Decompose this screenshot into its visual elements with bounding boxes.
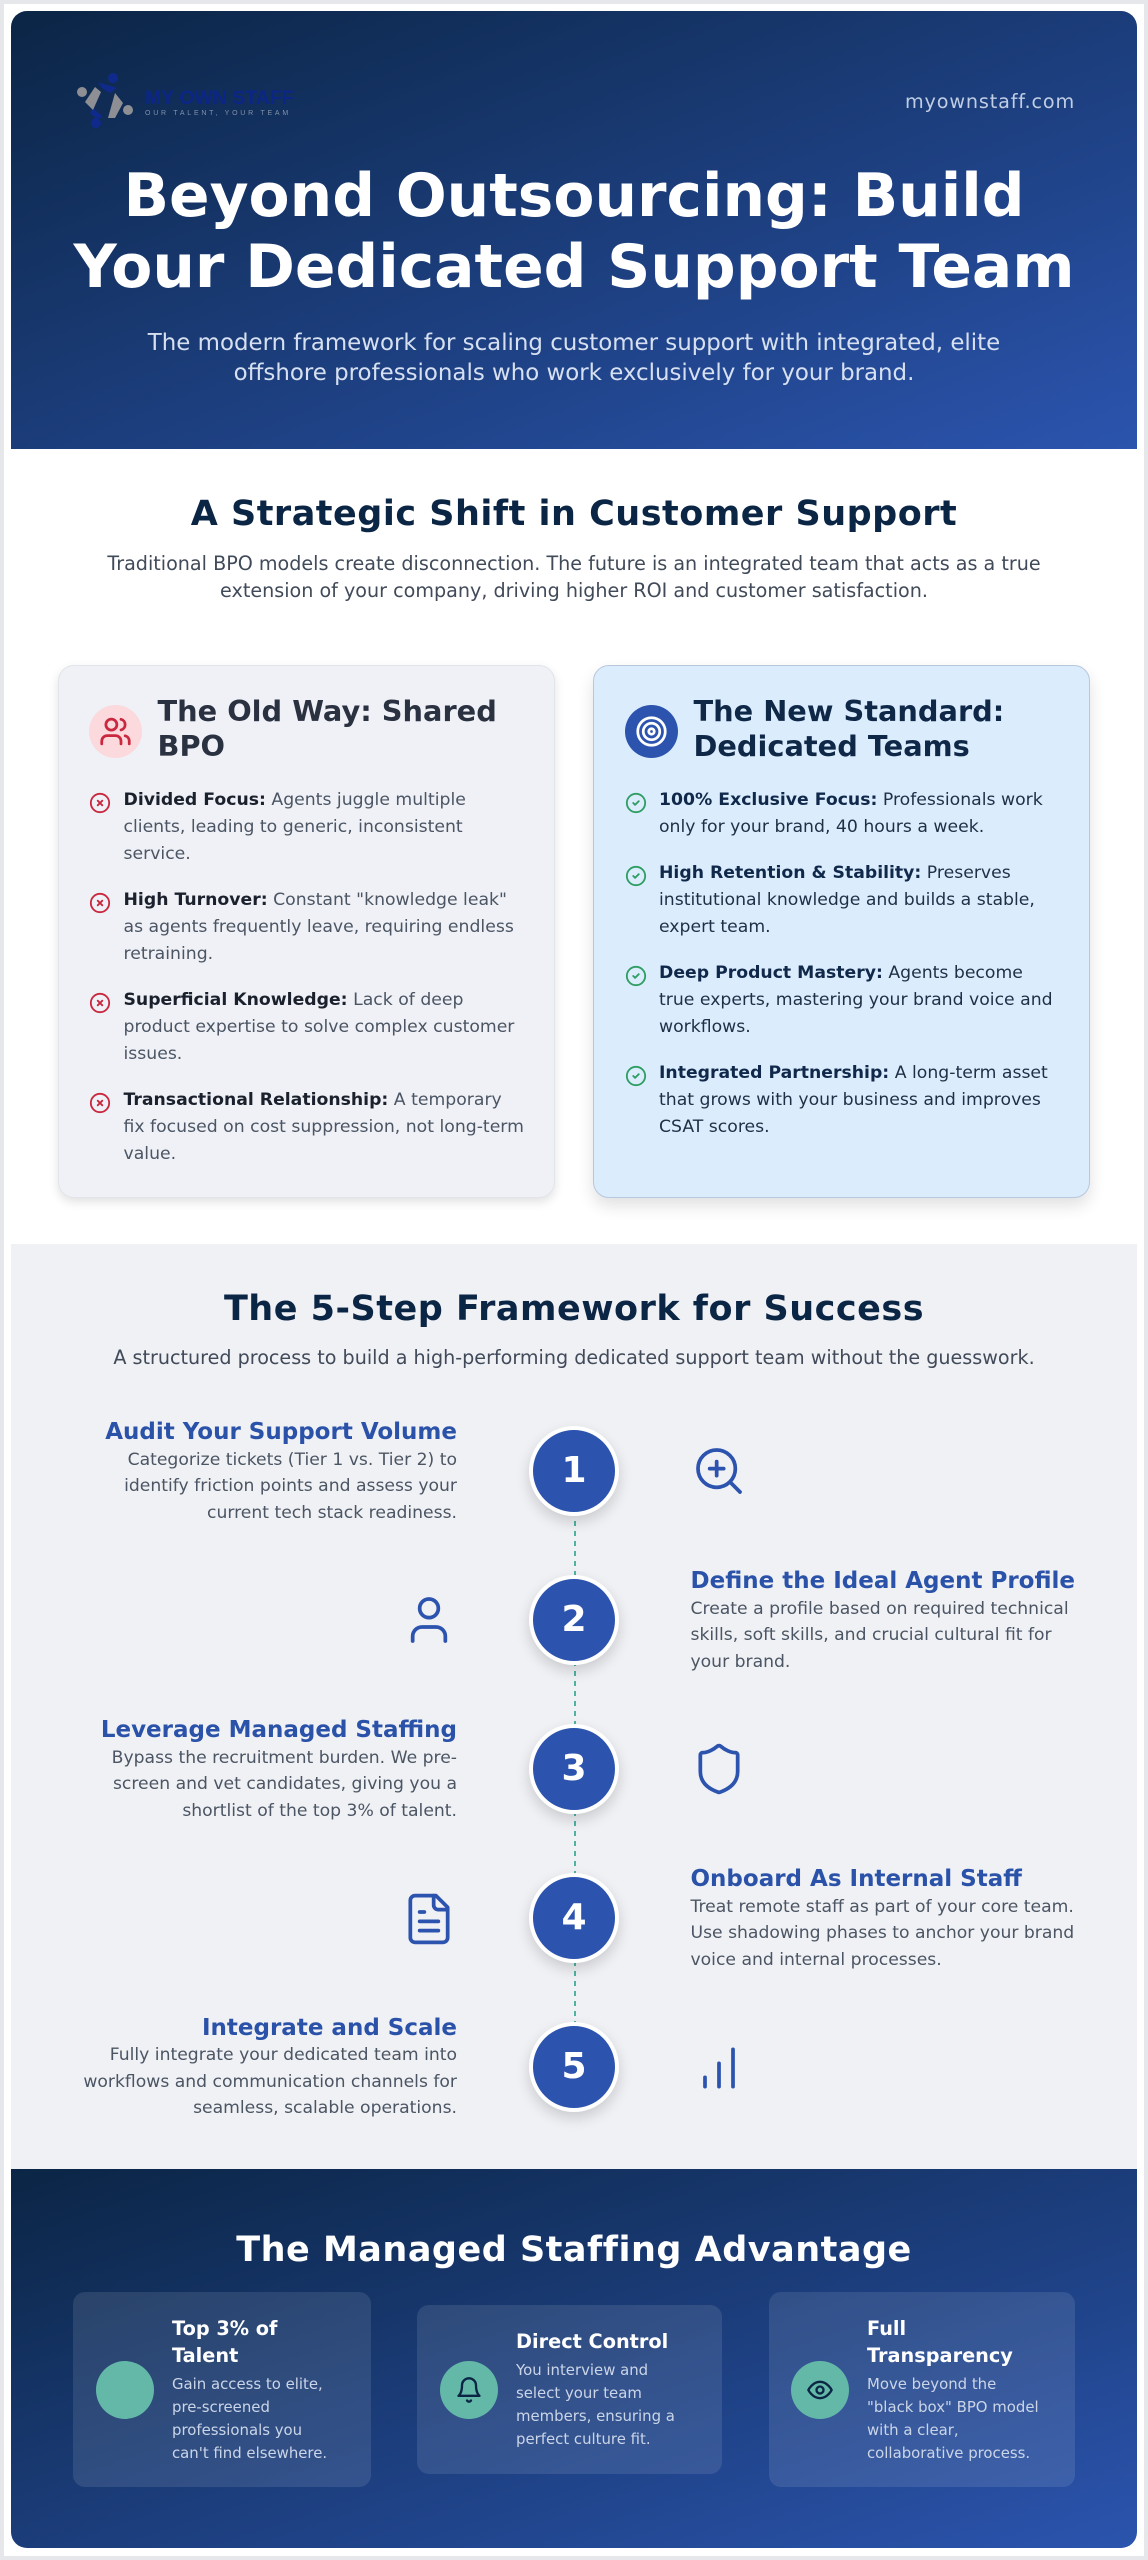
list item: superficial knowledge: issues. — [124, 1044, 182, 1064]
list item: product mastery — [659, 963, 1053, 1037]
direct control description: members, ensuring a — [516, 2407, 675, 2425]
section heading: strategic shift: A Strategic Shift in Customer Support — [191, 494, 957, 534]
icon: users — [89, 705, 142, 758]
step 5 description: seamless, scalable operations. — [193, 2098, 457, 2118]
step 5 description: workflows and communication channels for — [83, 2072, 457, 2092]
section intro: strategic shift — [107, 552, 1041, 602]
section intro: strategic shift: Traditional BPO models create disconnection. The future is an integrated team that acts as a true — [107, 552, 1041, 574]
panel: framework section — [11, 1244, 1137, 2169]
icon: check circle — [626, 1066, 646, 1086]
website url: myownstaff.com — [905, 90, 1075, 113]
step 5 description: Fully integrate your dedicated team into — [110, 2045, 457, 2065]
step 2 title: Define the Ideal Agent Profile — [690, 1568, 1075, 1594]
section heading: framework: The 5-Step Framework for Success — [224, 1289, 924, 1329]
step 4 description: Use shadowing phases to anchor your brand — [690, 1923, 1074, 1943]
icon: x circle — [90, 992, 110, 1014]
transparency description: with a clear, — [867, 2421, 959, 2439]
list item: transactional relationship: fix focused on cost suppression, not long-term — [124, 1116, 524, 1136]
list item: integrated partnership: CSAT scores. — [659, 1117, 770, 1137]
list item: integrated partnership: that grows with your business and improves — [659, 1090, 1041, 1110]
top talent description: professionals you — [172, 2421, 302, 2439]
step 4 description — [690, 1896, 1074, 1970]
list item: product mastery: true experts, mastering your brand voice and — [659, 990, 1053, 1010]
icon: x circle — [90, 792, 110, 814]
subtitle — [148, 330, 1000, 386]
list item: integrated partnership — [659, 1063, 1048, 1137]
panel: new standard — [593, 665, 1090, 1198]
step 3 description: shortlist of the top 3% of talent. — [182, 1801, 457, 1821]
header band — [11, 11, 1137, 449]
list item: high turnover — [124, 890, 514, 964]
icon: teal circle — [96, 2361, 154, 2419]
heading: new standard — [694, 694, 1004, 762]
transparency description — [867, 2373, 1039, 2465]
icon: bar chart — [703, 2048, 735, 2088]
step 2 number: 2 — [561, 1599, 587, 1640]
step 5 number — [529, 2022, 619, 2112]
list item: high turnover: High Turnover: Constant "knowledge leak" — [124, 890, 507, 910]
direct control description: You interview and — [516, 2361, 648, 2379]
step 1 description: current tech stack readiness. — [207, 1503, 457, 1523]
icon: eye — [791, 2361, 849, 2419]
transparency title — [867, 2315, 1039, 2369]
list item: superficial knowledge — [124, 990, 514, 1064]
step 3 number: 3 — [561, 1748, 587, 1789]
step 1 text — [105, 1419, 457, 1523]
list item: superficial knowledge: Superficial Knowledge: Lack of deep — [124, 990, 463, 1010]
step 5 title: Integrate and Scale — [202, 2014, 457, 2040]
step 5 text — [83, 2014, 457, 2118]
step 4 title: Onboard As Internal Staff — [690, 1866, 1022, 1892]
subtitle: The modern framework for scaling customer support with integrated, elite — [148, 330, 1000, 356]
list item: high retention — [659, 863, 1035, 937]
icon: shield — [698, 1744, 740, 1794]
top talent text — [172, 2315, 327, 2465]
list item: exclusive focus: 100% Exclusive Focus: Professionals work — [659, 790, 1043, 810]
list item: divided focus: clients, leading to generic, inconsistent — [124, 817, 463, 837]
icon: document — [408, 1894, 450, 1944]
list item: divided focus — [124, 790, 466, 864]
transparency description: Move beyond the — [867, 2375, 996, 2393]
heading: old way: BPO — [158, 728, 225, 762]
transparency title: Full — [867, 2317, 906, 2340]
step 4 text — [690, 1866, 1074, 1970]
transparency text — [867, 2315, 1039, 2465]
step 4 number: 4 — [561, 1897, 587, 1938]
heading: new standard: Dedicated Teams — [694, 728, 970, 762]
list item: transactional relationship — [124, 1090, 524, 1164]
advantage card: transparency — [769, 2292, 1075, 2487]
icon: person — [410, 1597, 448, 1643]
footer band — [11, 2169, 1137, 2548]
icon: magnifier — [696, 1448, 742, 1494]
transparency description: "black box" BPO model — [867, 2398, 1039, 2416]
step 2 description: Create a profile based on required technical — [690, 1598, 1069, 1618]
list item: high turnover: retraining. — [124, 944, 213, 964]
logo tagline: OUR TALENT, YOUR TEAM — [145, 110, 291, 117]
direct control text — [516, 2328, 675, 2451]
icon: check circle — [626, 792, 646, 814]
timeline connector — [574, 1516, 576, 2022]
step 5 number: 5 — [561, 2046, 587, 2087]
step 5 description — [83, 2045, 457, 2118]
top talent description: Gain access to elite, — [172, 2375, 323, 2393]
step 2 description: your brand. — [690, 1652, 790, 1672]
step 3 title: Leverage Managed Staffing — [101, 1717, 457, 1743]
direct control description: select your team — [516, 2384, 642, 2402]
step 3 description: Bypass the recruitment burden. We pre- — [112, 1748, 457, 1768]
top talent title — [172, 2315, 327, 2369]
title: Beyond Outsourcing: Build — [123, 160, 1025, 230]
list item: high retention: High Retention & Stability: Preserves — [659, 863, 1011, 883]
list item: high retention: institutional knowledge and builds a stable, — [659, 890, 1035, 910]
heading: old way: The Old Way: Shared — [158, 694, 497, 728]
step 1 description: identify friction points and assess your — [124, 1476, 457, 1496]
icon: x circle — [90, 1092, 110, 1114]
advantage card: direct control — [417, 2305, 722, 2474]
step 3 text — [101, 1717, 457, 1821]
top talent description: pre-screened — [172, 2398, 270, 2416]
step 4 description: Treat remote staff as part of your core team. — [690, 1896, 1074, 1916]
list item: high turnover: as agents frequently leave, requiring endless — [124, 916, 514, 936]
step 1 description: Categorize tickets (Tier 1 vs. Tier 2) to — [128, 1450, 457, 1470]
title — [73, 160, 1075, 302]
list item: high retention: expert team. — [659, 917, 771, 937]
logo — [77, 73, 294, 128]
logo mark — [77, 73, 133, 128]
step 2 number — [529, 1575, 619, 1665]
top talent title: Talent — [172, 2344, 238, 2367]
list item: exclusive focus: only for your brand, 40 hours a week. — [659, 817, 984, 837]
subtitle: offshore professionals who work exclusively for your brand. — [234, 360, 914, 386]
step 3 description — [112, 1748, 457, 1821]
step 2 description — [690, 1598, 1069, 1672]
list item: product mastery: Deep Product Mastery: Agents become — [659, 963, 1023, 983]
list item: superficial knowledge: product expertise to solve complex customer — [124, 1016, 514, 1036]
list item: transactional relationship: value. — [124, 1144, 176, 1164]
top talent description: can't find elsewhere. — [172, 2444, 327, 2462]
heading: new standard: The New Standard: — [694, 694, 1004, 728]
advantage card: top talent — [73, 2292, 371, 2487]
step 1 title: Audit Your Support Volume — [105, 1419, 457, 1445]
list item: divided focus: service. — [124, 844, 191, 864]
step 1 description — [124, 1450, 457, 1523]
section intro: framework: A structured process to build a high-performing dedicated support team without the guesswork. — [113, 1346, 1035, 1368]
icon: x circle — [90, 892, 110, 914]
list item: transactional relationship: Transactional Relationship: A temporary — [124, 1090, 502, 1110]
transparency title: Transparency — [867, 2344, 1013, 2367]
list item: integrated partnership: Integrated Partnership: A long-term asset — [659, 1063, 1048, 1083]
icon: bell — [440, 2361, 498, 2419]
icon: target — [625, 705, 678, 758]
heading: old way — [158, 694, 497, 762]
list item: exclusive focus — [659, 790, 1043, 837]
step 1 number: 1 — [561, 1450, 587, 1491]
step 4 number — [529, 1873, 619, 1963]
title: Your Dedicated Support Team — [73, 232, 1075, 302]
step 1 number — [529, 1426, 619, 1516]
direct control description: perfect culture fit. — [516, 2430, 651, 2448]
step 3 number — [529, 1724, 619, 1814]
step 3 description: screen and vet candidates, giving you a — [113, 1774, 457, 1794]
panel: old way — [58, 665, 555, 1198]
direct control description — [516, 2359, 675, 2451]
footer heading: The Managed Staffing Advantage — [236, 2230, 912, 2270]
list item: divided focus: Divided Focus: Agents juggle multiple — [124, 790, 466, 810]
logo wordmark: MY OWN STAFF — [145, 87, 294, 109]
step 2 text — [690, 1568, 1075, 1672]
icon: check circle — [626, 966, 646, 986]
step 2 description: skills, soft skills, and crucial cultural fit for — [690, 1625, 1052, 1645]
transparency description: collaborative process. — [867, 2444, 1030, 2462]
direct control title: Direct Control — [516, 2330, 668, 2353]
section intro: strategic shift: extension of your company, driving higher ROI and customer satisfaction. — [220, 579, 928, 602]
icon: check circle — [626, 866, 646, 886]
list item: product mastery: workflows. — [659, 1017, 751, 1037]
top talent title: Top 3% of — [172, 2317, 277, 2340]
top talent description — [172, 2373, 327, 2465]
step 4 description: voice and internal processes. — [690, 1950, 942, 1970]
